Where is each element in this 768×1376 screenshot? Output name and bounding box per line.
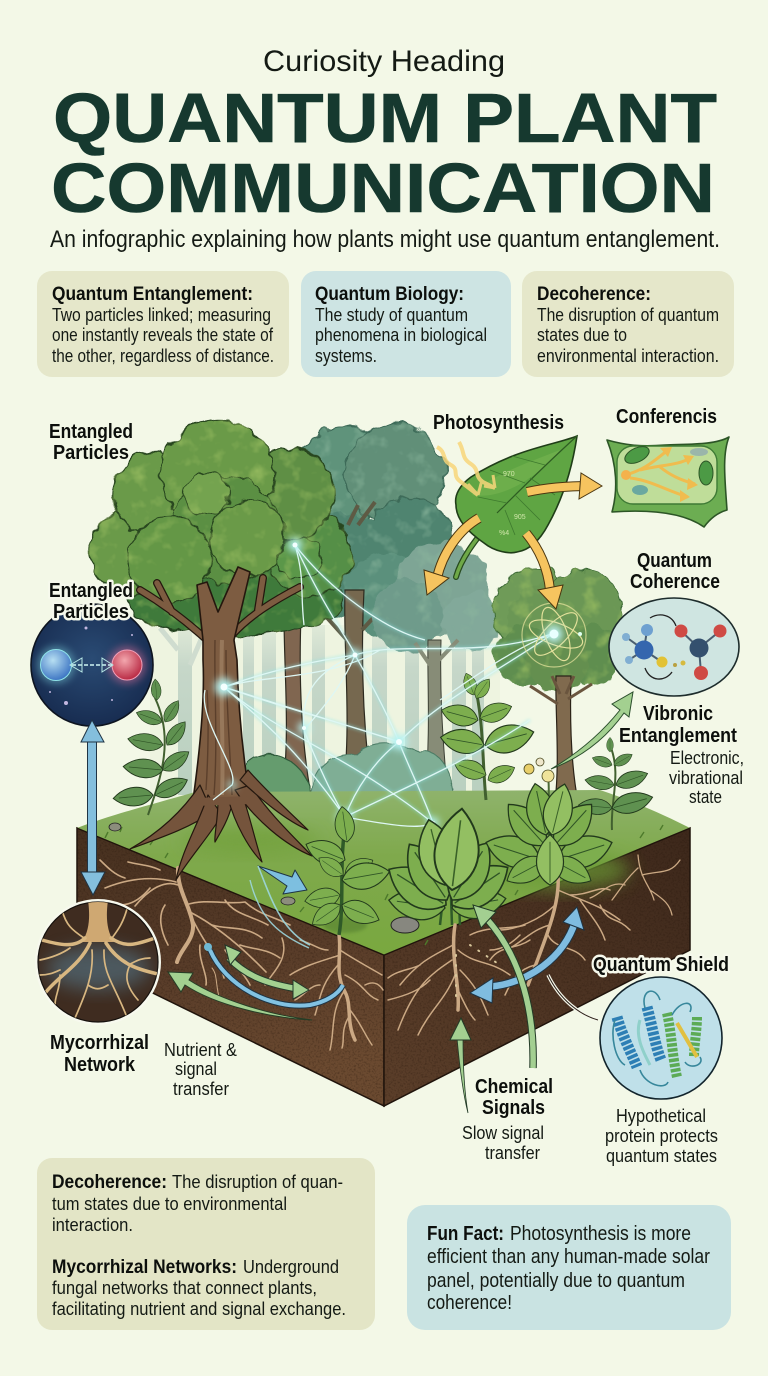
tree: right tree with atom	[493, 568, 622, 802]
callout: entangled particles circle	[31, 604, 153, 726]
text: nutrient and signal transfer: transfer	[173, 1079, 229, 1099]
label: entangled particles badge	[49, 580, 133, 623]
panel: quantum entanglement	[37, 271, 289, 377]
label: quantum coherence: Coherence	[630, 571, 720, 593]
plant: upper centre sapling	[439, 671, 537, 800]
text: slow signal transfer	[462, 1123, 544, 1163]
panel: definitions: Decoherence:	[52, 1172, 167, 1193]
illustration: ground block	[77, 790, 690, 1106]
arrow: leaf to atom	[526, 533, 563, 609]
plant: right fern	[578, 737, 655, 830]
arrow: blue double arrow right	[470, 907, 584, 1003]
panel: quantum entanglement: one instantly reveals the state of	[52, 325, 274, 345]
arrow: blue thin curve	[204, 866, 343, 1006]
icon: photosynthesis leaf	[456, 436, 577, 577]
plant: front right plant	[481, 781, 617, 891]
arrow: green to quantum coherence	[551, 692, 633, 769]
text: electronic vibrational state	[669, 748, 744, 807]
icon: atom	[522, 603, 586, 667]
flower	[524, 758, 554, 835]
text: slow signal transfer: Slow signal	[462, 1123, 544, 1143]
panel: definitions: The disruption of quan-	[172, 1171, 343, 1192]
text: electronic vibrational state: state	[689, 787, 722, 807]
label: chemical signals	[475, 1076, 553, 1119]
tree: main foreground tree	[91, 418, 352, 880]
label: vibronic entanglement	[619, 703, 737, 747]
title	[51, 79, 717, 227]
arrow: green short signal	[450, 1018, 471, 1113]
bushes	[237, 743, 455, 805]
panel: quantum entanglement: Two particles linked; measuring	[52, 305, 271, 325]
panel: fun fact: coherence!	[427, 1292, 512, 1314]
label: entangled particles top	[49, 421, 133, 464]
title: COMMUNICATION	[51, 149, 715, 227]
label: photosynthesis: Photosynthesis	[433, 412, 564, 434]
panel: quantum biology: The study of quantum	[315, 305, 468, 325]
panel: decoherence: environmental interaction.	[537, 346, 719, 366]
tree: teal background tree	[283, 424, 452, 795]
illustration: forest backdrop	[150, 625, 500, 800]
title: QUANTUM PLANT	[53, 79, 717, 157]
text: electronic vibrational state: Electronic,	[670, 748, 744, 768]
text: nutrient and signal transfer: Nutrient &	[164, 1040, 237, 1060]
panel: definitions: interaction.	[52, 1214, 133, 1235]
text: nutrient and signal transfer: signal	[175, 1059, 217, 1079]
panel: quantum biology: Quantum Biology:	[315, 284, 464, 305]
text: hypothetical protein: Hypothetical	[616, 1106, 706, 1126]
panel: definitions: fungal networks that connect plants,	[52, 1277, 317, 1298]
icon: photosynthesis leaf: %4	[499, 530, 509, 537]
icon: sun rays	[437, 442, 495, 495]
arrow: double blue vertical	[81, 720, 105, 895]
callout: quantum shield protein	[600, 977, 722, 1099]
panel: fun fact: efficient than any human-made solar	[427, 1246, 710, 1268]
arrow: green tapered to mycorrhizal circle	[168, 972, 312, 1020]
panel: decoherence: Decoherence:	[537, 284, 651, 305]
panel: fun fact: panel, potentially due to quantum	[427, 1270, 685, 1292]
panel: quantum biology: systems.	[315, 346, 377, 366]
plant: seedling	[302, 805, 392, 935]
label: quantum coherence	[630, 550, 720, 593]
plant: left fern	[112, 679, 193, 815]
panel: definitions: Mycorrhizal Networks:	[52, 1257, 237, 1278]
label: entangled particles badge: Particles	[53, 601, 129, 623]
text: slow signal transfer: transfer	[485, 1143, 540, 1163]
arrow: leaf to forest	[424, 518, 479, 595]
surface roots	[130, 770, 312, 880]
arrow: green double arrow	[225, 945, 309, 999]
panel: decoherence: The disruption of quantum	[537, 305, 719, 325]
tree: misty distant tree	[372, 542, 502, 795]
plant: broad leafy plant	[379, 806, 518, 925]
label: quantum shield: Quantum Shield	[593, 954, 729, 976]
label: entangled particles top: Entangled	[49, 421, 133, 443]
callout: quantum coherence molecule	[609, 598, 739, 696]
panel: definitions: facilitating nutrient and signal exchange.	[52, 1298, 346, 1319]
icon: photosynthesis leaf: 905	[514, 514, 526, 521]
label: vibronic entanglement: Entanglement	[619, 725, 737, 747]
panel: quantum biology	[301, 271, 511, 377]
panel: decoherence: states due to	[537, 325, 627, 345]
roots: underground network	[100, 855, 680, 1050]
label: chemical signals: Signals	[482, 1097, 545, 1119]
panel: quantum biology: phenomena in biological	[315, 325, 487, 345]
label: entangled particles badge: Entangled	[49, 580, 133, 602]
text: hypothetical protein: quantum states	[606, 1146, 717, 1166]
panel: definitions: tum states due to environmental	[52, 1193, 287, 1214]
panel: definitions: Underground	[243, 1256, 339, 1277]
label: conferencis: Conferencis	[616, 406, 717, 428]
label: mycorrhizal network: Mycorrhizal	[50, 1032, 149, 1054]
canopy	[91, 418, 352, 636]
panel: fun fact	[407, 1205, 731, 1330]
heading: eyebrow: Curiosity Heading	[263, 45, 505, 78]
callout: mycorrhizal network circle	[35, 899, 161, 1025]
label: mycorrhizal network: Network	[64, 1054, 136, 1076]
panel: quantum entanglement: the other, regardless of distance.	[52, 346, 274, 366]
arrow: blue surface arrow	[258, 866, 307, 894]
panel: fun fact: Fun Fact:	[427, 1223, 504, 1245]
label: mycorrhizal network	[50, 1032, 149, 1076]
text: hypothetical protein: protein protects	[605, 1126, 718, 1146]
icon: plant cell	[607, 437, 729, 527]
label: entangled particles top: Particles	[53, 442, 129, 464]
icon: photosynthesis leaf: 970	[503, 471, 515, 478]
text: electronic vibrational state: vibrational	[669, 768, 743, 788]
panel: definitions	[37, 1158, 375, 1330]
label: vibronic entanglement: Vibronic	[643, 703, 713, 725]
panel: fun fact: Photosynthesis is more	[510, 1223, 691, 1245]
panel: quantum entanglement: Quantum Entanglement:	[52, 284, 253, 305]
text: nutrient and signal transfer	[164, 1040, 237, 1099]
text: hypothetical protein	[605, 1106, 718, 1166]
trunk	[140, 578, 300, 640]
arrow: leaf to cell	[527, 473, 602, 499]
label: quantum coherence: Quantum	[637, 550, 712, 572]
arrow: green long signal	[473, 905, 533, 1068]
connector: shield leader	[548, 975, 598, 1020]
label: chemical signals: Chemical	[475, 1076, 553, 1098]
network: entanglement lines	[204, 538, 554, 829]
panel: decoherence	[522, 271, 734, 377]
